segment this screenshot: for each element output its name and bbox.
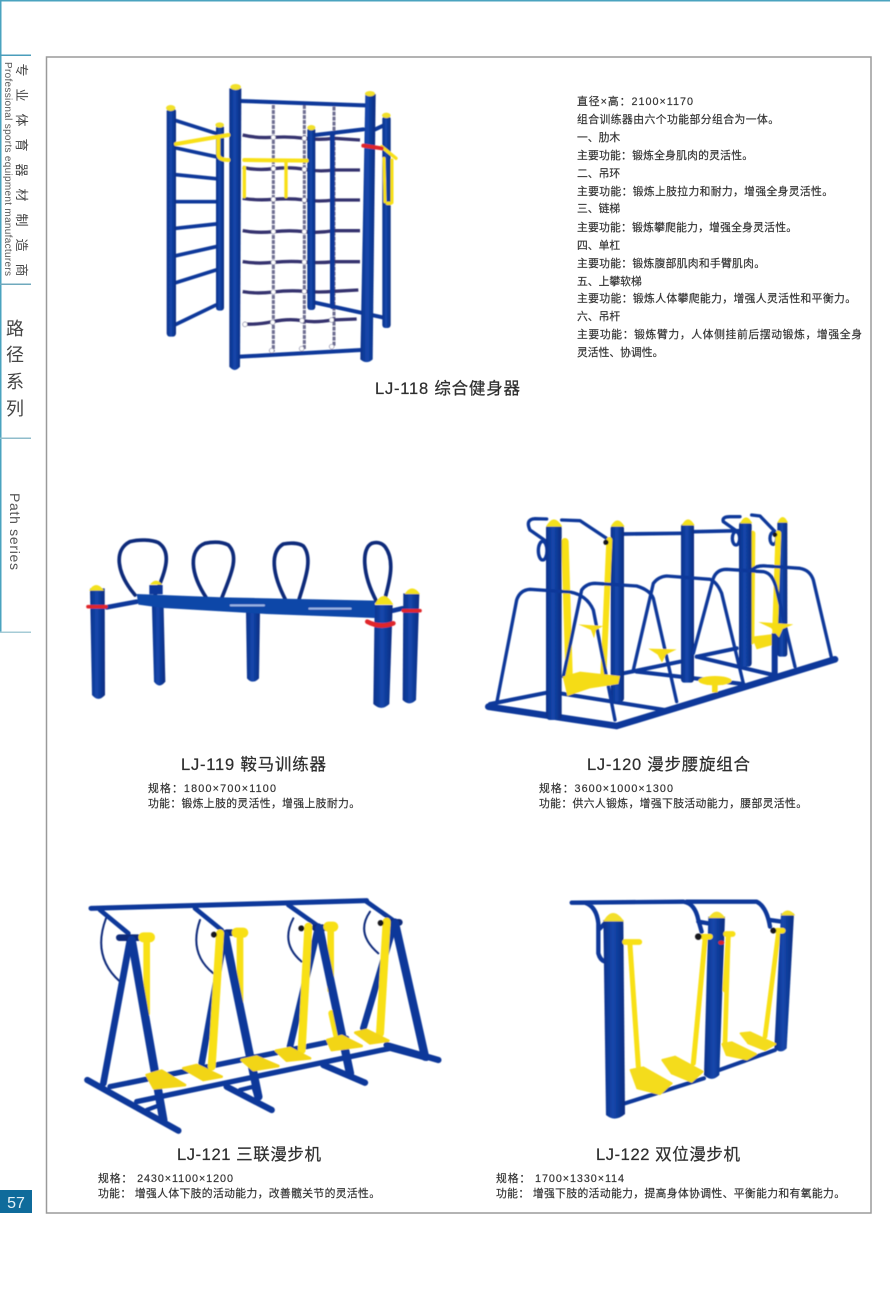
posts xyxy=(681,523,694,683)
sidebar: series title: 系 xyxy=(6,372,24,392)
bearings xyxy=(211,920,384,938)
title: LJ-120: LJ-120 漫步腰旋组合 xyxy=(587,755,750,774)
equipment illustration: LJ-122 xyxy=(572,902,795,1119)
description: LJ-118: 组合训练器由六个功能部分组合为一体。 xyxy=(577,112,779,126)
equipment illustration: LJ-118 xyxy=(166,84,396,370)
front yellow poles xyxy=(625,931,783,1067)
sidebar: vertical Chinese tagline: 制 xyxy=(14,213,29,227)
sidebar: series title: 列 xyxy=(6,399,24,419)
yellow pedals and twist discs xyxy=(563,622,793,696)
sidebar: vertical Chinese tagline: 专 xyxy=(14,63,29,77)
sidebar: vertical Chinese tagline: 材 xyxy=(14,188,29,202)
red clamps xyxy=(88,607,420,625)
sidebar: English series title: Path series xyxy=(7,493,23,570)
description: LJ-119 xyxy=(148,781,360,810)
bearings and red label xyxy=(695,928,776,945)
arcs xyxy=(101,912,378,982)
description: LJ-119: 规格：1800×700×1100 xyxy=(148,781,276,795)
sidebar: series title: 径 xyxy=(6,345,24,365)
foot bars xyxy=(87,1045,438,1131)
description: LJ-118: 二、吊环 xyxy=(577,167,620,180)
rear frame xyxy=(240,101,382,357)
sidebar: vertical Chinese tagline: 业 xyxy=(14,88,29,102)
posts xyxy=(90,588,105,699)
description: LJ-118: 直径×高：2100×1170 xyxy=(577,94,693,108)
description: LJ-120: 功能：供六人锻炼，增强下肢活动能力，腰部灵活性。 xyxy=(539,796,807,810)
description: LJ-118: 主要功能：锻炼上肢拉力和耐力，增强全身灵活性。 xyxy=(577,184,833,198)
top rail xyxy=(572,902,782,962)
description: LJ-118: 主要功能：锻炼全身肌肉的灵活性。 xyxy=(577,148,753,162)
yellow front poles xyxy=(143,922,387,1067)
caps xyxy=(89,581,420,605)
arms xyxy=(107,602,403,611)
caps xyxy=(603,910,795,921)
post caps xyxy=(166,84,391,130)
yellow back pole and pedal xyxy=(752,533,778,649)
description: LJ-118: 一、肋木 xyxy=(577,130,620,144)
page border lines xyxy=(0,0,890,633)
front post xyxy=(546,524,562,720)
sidebar: vertical Chinese tagline: 体 xyxy=(14,113,29,127)
pedals xyxy=(631,1032,775,1094)
description: LJ-118: 主要功能：锻炼人体攀爬能力，增强人灵活性和平衡力。 xyxy=(577,291,856,305)
description: LJ-118: 四、单杠 xyxy=(577,239,620,252)
description: LJ-121: 规格： 2430×1100×1200 xyxy=(98,1171,233,1185)
sidebar: vertical Chinese tagline: 器 xyxy=(14,163,29,177)
sidebar: vertical Chinese tagline: 造 xyxy=(14,238,29,252)
sidebar: English tagline: Professional sports equipment manufacturers xyxy=(2,62,13,276)
description: LJ-118: 主要功能：锻炼攀爬能力，增强全身灵活性。 xyxy=(577,220,797,234)
loops xyxy=(119,540,391,602)
beam xyxy=(137,594,375,618)
description: LJ-120: 规格：3600×1000×1300 xyxy=(539,781,673,795)
base frame xyxy=(488,648,835,726)
sidebar: vertical Chinese tagline xyxy=(14,63,29,277)
caps and bearings xyxy=(546,517,788,527)
title: LJ-118: LJ-118 综合健身器 xyxy=(375,379,520,398)
base rails xyxy=(110,1038,427,1102)
description: LJ-119: 功能：锻炼上肢的灵活性，增强上肢耐力。 xyxy=(148,796,360,810)
description: LJ-118: 主要功能：锻炼腹部肌肉和手臂肌肉。 xyxy=(577,256,765,270)
connecting rails xyxy=(625,1050,775,1103)
sidebar: series title xyxy=(6,319,24,419)
posts xyxy=(704,917,725,1079)
net chains xyxy=(243,105,360,353)
title: LJ-121: LJ-121 三联漫步机 xyxy=(177,1145,322,1164)
title: LJ-122: LJ-122 双位漫步机 xyxy=(596,1145,740,1164)
pedals xyxy=(147,1030,388,1088)
handle bars xyxy=(528,515,777,560)
sidebar: vertical Chinese tagline: 育 xyxy=(14,138,29,152)
equipment illustration: LJ-121 xyxy=(87,901,438,1131)
description: LJ-118: 六、吊杆 xyxy=(577,309,620,323)
page number: 57 xyxy=(7,1195,25,1212)
back yellow poles xyxy=(725,933,778,1043)
top bar and braces xyxy=(91,901,399,938)
description: LJ-122 xyxy=(496,1171,845,1200)
wall bars xyxy=(176,121,216,324)
description: LJ-121: 功能： 增强人体下肢的活动能力，改善髋关节的灵活性。 xyxy=(98,1186,380,1200)
curved A-frames xyxy=(497,566,832,720)
sidebar: vertical Chinese tagline: 商 xyxy=(14,263,29,277)
description: LJ-122: 功能： 增强下肢的活动能力，提高身体协调性、平衡能力和有氧能力。 xyxy=(496,1186,845,1200)
page number xyxy=(0,1190,32,1213)
posts xyxy=(167,108,176,337)
yellow swing arms xyxy=(565,533,778,683)
description: LJ-118: 三、链梯 xyxy=(577,201,620,215)
description: LJ-120 xyxy=(539,781,807,810)
equipment illustration: LJ-120 xyxy=(488,515,835,726)
description: LJ-118: 灵活性、协调性。 xyxy=(577,345,663,359)
description: LJ-122: 规格： 1700×1330×114 xyxy=(496,1171,624,1185)
rear legs and back poles xyxy=(103,922,395,1083)
sidebar: series title: 路 xyxy=(6,319,24,339)
equipment illustration: LJ-119 xyxy=(88,540,420,708)
description: LJ-118: 五、上攀软梯 xyxy=(577,274,642,288)
yellow bars and rings xyxy=(176,135,396,203)
description: LJ-118: 主要功能：锻炼臂力，人体侧挂前后摆动锻炼，增强全身 xyxy=(577,327,862,341)
title: LJ-119: LJ-119 鞍马训练器 xyxy=(181,755,326,774)
description: LJ-121 xyxy=(98,1171,380,1200)
front legs xyxy=(132,923,425,1120)
description: LJ-118 xyxy=(577,94,862,359)
